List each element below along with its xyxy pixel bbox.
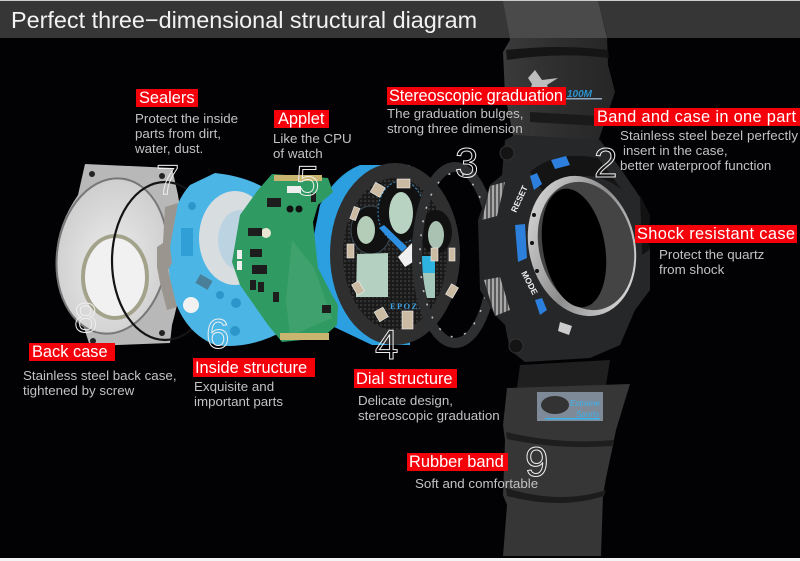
bottom edge (0, 558, 800, 561)
callout: band and case (594, 108, 800, 173)
callout: rubber band (407, 453, 538, 491)
callout: back case: Stainless steel back case, (23, 368, 177, 383)
button labels: RESET (509, 183, 530, 214)
lower rubber band (503, 360, 630, 556)
callout: band and case: better waterproof function (620, 158, 771, 173)
callout: sealers: Sealers (139, 89, 195, 107)
LCD screens (356, 253, 388, 297)
band logo (528, 70, 602, 100)
olive gasket (83, 236, 147, 318)
luminous markers (347, 179, 458, 329)
callout: shock resistant case: Shock resistant case (637, 225, 795, 243)
callout: inside structure: important parts (194, 394, 283, 409)
black o-ring (112, 182, 218, 340)
sealer metal strip (157, 203, 178, 310)
dial structure (330, 163, 460, 345)
number 3: 3 (455, 139, 478, 186)
callout: applet: Like the CPU (273, 131, 352, 146)
number 9: 9 (525, 438, 548, 485)
band logo plate: Extreme (570, 399, 600, 408)
applet circuit board (232, 174, 338, 342)
number 6: 6 (206, 310, 229, 357)
callout: back case (23, 343, 177, 398)
callout: inside structure: Exquisite and (194, 379, 274, 394)
callout: dial structure: Delicate design, (358, 393, 453, 408)
band logo: R 100M (557, 89, 593, 100)
callout: sealers: water, dust. (134, 141, 203, 156)
callout: applet: of watch (273, 146, 323, 161)
case grille panels (482, 182, 505, 220)
graduation ring (417, 167, 493, 343)
number 5: 5 (296, 157, 319, 204)
callout: band and case: Band and case in one part (597, 108, 796, 126)
callout: inside structure (193, 358, 315, 409)
callout: sealers: Protect the inside (135, 111, 238, 126)
callout: dial structure: stereoscopic graduation (358, 408, 500, 423)
callout: sealers (134, 89, 238, 156)
callout: shock resistant case: Protect the quartz (659, 247, 764, 262)
upper rubber band (503, 1, 615, 145)
watch case with bezel (478, 135, 651, 362)
blue dial holder (312, 165, 410, 345)
callout: inside structure: Inside structure (195, 359, 307, 377)
callout: applet: Applet (278, 110, 325, 128)
callout: shock resistant case (635, 225, 797, 277)
blue accents (551, 156, 570, 169)
callout: stereoscopic graduation: Stereoscopic graduation (389, 87, 563, 105)
number 4: 4 (375, 321, 398, 368)
callout: band and case: Stainless steel bezel perfectly (620, 128, 798, 143)
inside structure blue holder (169, 173, 285, 346)
callout: band and case: insert in the case, (623, 143, 728, 158)
blue hand and pointer (379, 225, 407, 252)
header title: Perfect three−dimensional structural diagram (11, 7, 477, 33)
header bar (0, 1, 800, 38)
top edge (0, 0, 800, 1)
callout: rubber band: Soft and comfortable (415, 476, 538, 491)
band logo plate (537, 392, 603, 421)
steel bezel (513, 164, 651, 328)
back case (47, 164, 183, 346)
callout: dial structure (354, 369, 500, 423)
callout: stereoscopic graduation: strong three dimension (387, 121, 523, 136)
callout: dial structure: Dial structure (356, 370, 453, 388)
callout: sealers: parts from dirt, (135, 126, 221, 141)
callout: applet (273, 110, 352, 161)
callout: rubber band: Rubber band (409, 453, 504, 471)
callout: stereoscopic graduation (387, 87, 566, 136)
number 2: 2 (594, 139, 617, 186)
callout: back case: Back case (32, 343, 108, 361)
number 8: 8 (74, 294, 97, 341)
dial brand: EPOZZ (390, 301, 424, 311)
callout: shock resistant case: from shock (659, 262, 725, 277)
number 7: 7 (156, 156, 179, 203)
part numbers (74, 139, 617, 485)
watch case with bezel: MODE (519, 269, 540, 297)
band logo plate: Sports (576, 410, 599, 419)
callout: back case: tightened by screw (23, 383, 135, 398)
callout: stereoscopic graduation: The graduation bulges, (387, 106, 524, 121)
